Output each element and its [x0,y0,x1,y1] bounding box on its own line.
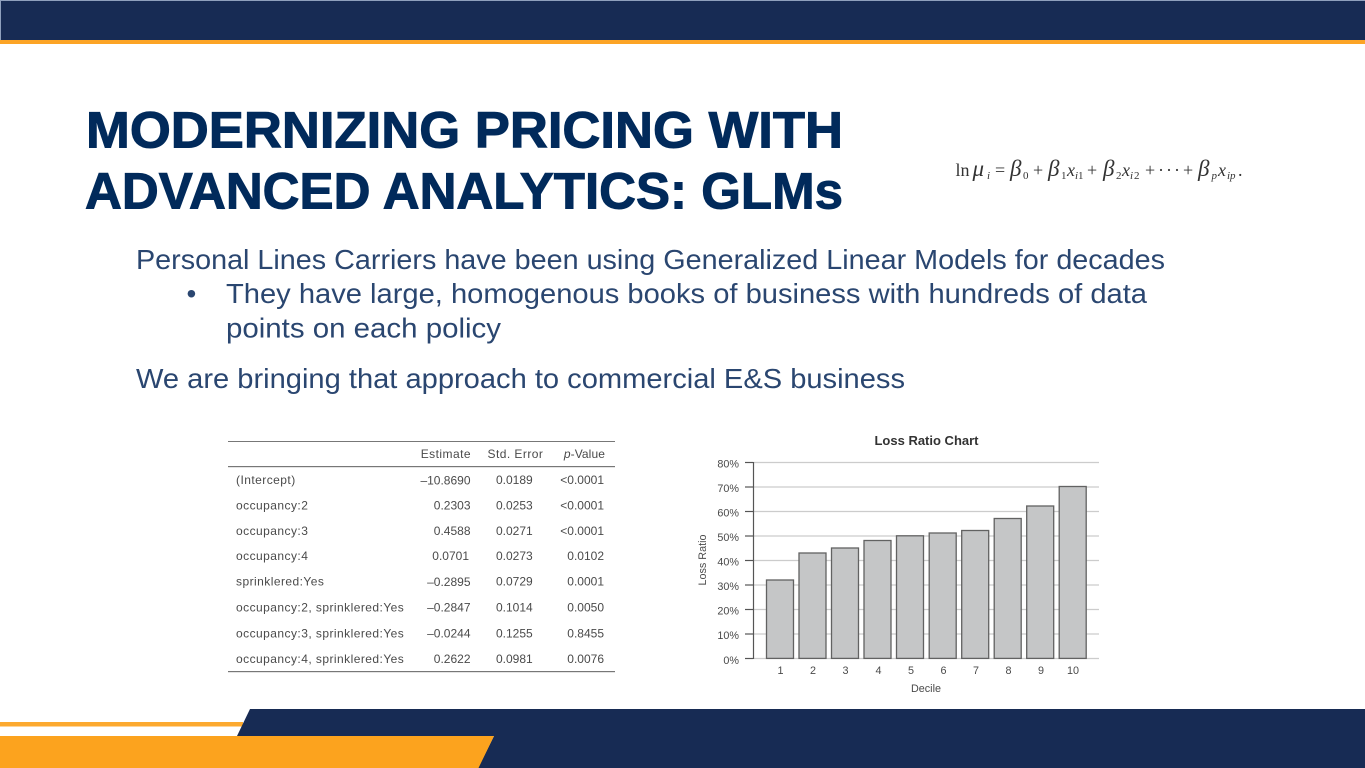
regression coefficient table: occupancy:4 [236,549,308,563]
y axis label: Loss Ratio [697,534,709,586]
formula: GLM log link equation: i [1130,170,1133,182]
regression coefficient table: –10.8690 [420,474,471,488]
formula: GLM log link equation: β [1197,156,1210,181]
formula: GLM log link equation: i [1075,170,1078,182]
formula: GLM log link equation: ln [956,160,970,180]
regression coefficient table: 0.0189 [496,473,533,487]
bar chart: loss ratio by decile: 30% [717,581,739,593]
regression coefficient table: occupancy:3, sprinklered:Yes [236,626,404,640]
formula: GLM log link equation: x [1066,160,1075,180]
chart title: Loss Ratio Chart [874,433,979,448]
bar chart: loss ratio by decile: 6 [940,665,947,677]
regression coefficient table: 0.0273 [496,549,533,563]
formula: GLM log link equation: 2 [1116,170,1122,182]
regression coefficient table: 0.2303 [434,498,471,512]
bar chart: loss ratio by decile: 4 [875,665,882,677]
formula: GLM log link equation: + [1145,160,1155,180]
body text: We are bringing that approach to commercial E&S business [136,363,905,394]
regression coefficient table: 0.0076 [567,652,604,666]
formula: GLM log link equation: 1 [1061,170,1066,182]
regression coefficient table: 0.0701 [432,549,469,563]
bar chart: loss ratio by decile: 1 [777,665,784,677]
bar chart: loss ratio by decile: 40% [717,556,739,568]
regression coefficient table: sprinklered:Yes [236,574,324,588]
formula: GLM log link equation: 2 [1134,170,1140,182]
formula: GLM log link equation: x [1217,160,1226,180]
formula: GLM log link equation: x [1121,160,1130,180]
formula: GLM log link equation: = [995,160,1005,180]
regression coefficient table [228,441,615,672]
regression coefficient table: 0.4588 [434,524,471,538]
formula: GLM log link equation: + [1033,160,1043,180]
regression coefficient table: occupancy:4, sprinklered:Yes [236,652,404,666]
regression coefficient table: <0.0001 [560,473,604,487]
footer banner [0,709,1365,768]
regression coefficient table: –0.0244 [427,626,471,640]
regression coefficient table: (Intercept) [236,473,296,487]
body text: They have large, homogenous books of business with hundreds of data [226,278,1147,309]
regression coefficient table: <0.0001 [560,498,604,512]
formula: GLM log link equation: + [1183,160,1193,180]
body text: Personal Lines Carriers have been using Generalized Linear Models for decades [136,244,1165,275]
bar chart: loss ratio by decile: 50% [717,532,739,544]
body text: points on each policy [226,312,501,344]
formula: GLM log link equation: p [1210,170,1218,182]
regression coefficient table: 0.1255 [496,626,533,640]
formula: GLM log link equation: · [1158,160,1164,180]
regression coefficient table: <0.0001 [560,524,604,538]
title: ADVANCED ANALYTICS: GLMs [85,163,843,220]
regression coefficient table: –0.2895 [427,575,471,589]
bar chart: loss ratio by decile: 2 [810,665,816,677]
formula: GLM log link equation: . [1238,160,1242,180]
bar chart: loss ratio by decile: 10% [717,630,739,642]
regression coefficient table: Estimate [421,447,471,461]
bar chart: loss ratio by decile: 80% [717,458,739,470]
title [85,102,843,220]
bar chart: loss ratio by decile: 20% [717,606,739,618]
regression coefficient table: 0.2622 [434,652,471,666]
regression coefficient table: 0.0253 [496,498,533,512]
regression coefficient table: 0.1014 [496,600,533,614]
regression coefficient table: occupancy:2, sprinklered:Yes [236,600,404,614]
bar chart: loss ratio by decile: 60% [717,508,739,520]
regression coefficient table: 0.0981 [496,652,533,666]
formula: GLM log link equation: ip [1227,170,1236,182]
formula: GLM log link equation: 0 [1023,170,1029,182]
formula: GLM log link equation: μ [972,156,984,181]
formula: GLM log link equation: + [1087,160,1097,180]
bar chart: loss ratio by decile: 8 [1005,665,1012,677]
formula: GLM log link equation: · [1166,160,1172,180]
formula: GLM log link equation: · [1174,160,1180,180]
regression coefficient table: 0.0729 [496,574,533,588]
regression coefficient table: 0.0102 [567,549,604,563]
regression coefficient table: p-Value [563,447,605,461]
bar chart: loss ratio by decile: 5 [908,665,914,677]
regression coefficient table: 0.0001 [567,574,604,588]
formula: GLM log link equation: 1 [1078,170,1084,182]
formula: GLM log link equation: β [1047,156,1060,181]
body text [136,244,1165,394]
formula: GLM log link equation: β [1009,156,1022,181]
regression coefficient table: occupancy:3 [236,524,308,538]
regression coefficient table: 0.8455 [567,626,604,640]
bar chart: loss ratio by decile: 0% [723,655,739,667]
bar chart: loss ratio by decile: 3 [842,665,849,677]
title: MODERNIZING PRICING WITH [86,102,843,158]
x axis label: Decile [911,683,941,695]
bar chart: loss ratio by decile: 10 [1067,665,1079,677]
regression coefficient table: Std. Error [488,447,543,461]
body text: • [186,278,196,309]
bar chart: loss ratio by decile: 9 [1038,665,1044,677]
bar chart: loss ratio by decile: 7 [973,665,979,677]
formula: GLM log link equation: i [987,170,990,182]
formula: GLM log link equation: β [1102,156,1115,181]
regression coefficient table: 0.0271 [496,524,533,538]
formula: GLM log link equation [956,156,1242,182]
top banner [0,0,1365,44]
regression coefficient table: occupancy:2 [236,498,308,512]
regression coefficient table: –0.2847 [427,600,471,614]
bar chart: loss ratio by decile: 70% [717,483,739,495]
bar chart: loss ratio by decile [697,433,1099,695]
regression coefficient table: 0.0050 [567,600,604,614]
